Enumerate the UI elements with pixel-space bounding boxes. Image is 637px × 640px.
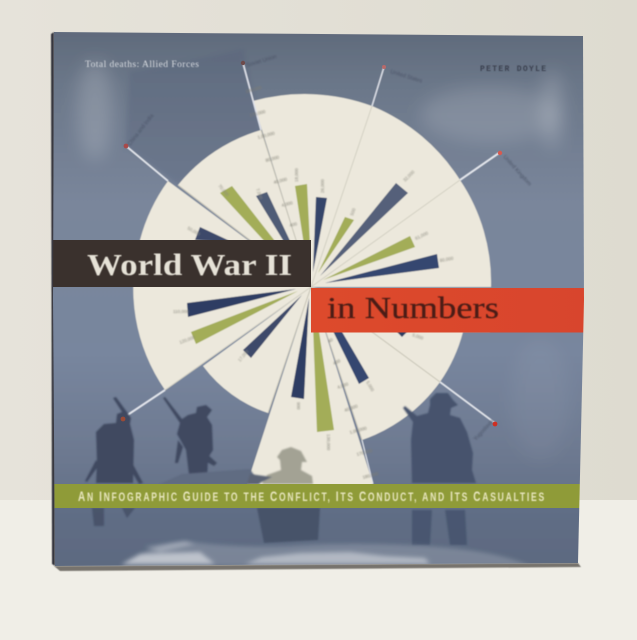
sector: right [311, 180, 491, 287]
axis tick labels [245, 85, 379, 480]
sector: top [253, 94, 372, 287]
value labels on bars: 5,000 [412, 332, 424, 341]
axis tick labels: 400 [289, 221, 298, 228]
axis tick labels: 180,000 [245, 85, 262, 94]
value labels on bars: 80,000 [439, 256, 454, 263]
axis tick labels: 170,000 [249, 109, 266, 118]
axis tick labels: 1,00,000 [257, 130, 276, 140]
background: table top [0, 500, 637, 640]
value labels on bars: 70,000 [217, 183, 230, 198]
book cover [50, 30, 591, 570]
book spine edge [51, 32, 55, 566]
soldier silhouette: left, with rifle [85, 397, 143, 526]
country labels at leader ends: United States [389, 69, 423, 85]
value labels on bars: 32,000 [402, 169, 416, 183]
author name: PETER DOYLE [480, 65, 546, 74]
value labels on bars [173, 168, 454, 451]
title: in Numbers: in Numbers [327, 290, 499, 325]
value labels on bars: 900 [296, 402, 301, 410]
axis tick labels: 4,000 [281, 200, 294, 208]
axis tick labels: 4,000 [337, 381, 349, 390]
value labels on bars: 130,000 [326, 434, 331, 451]
value labels on bars: 17,000 [237, 349, 250, 363]
tagline text: AN INFOGRAPHIC GUIDE TO THE CONFLICT, ITS CONDUCT, AND ITS CASUALTIES [78, 488, 546, 504]
value labels on bars: 500 [349, 207, 357, 216]
soldier silhouette: centre, in disc [247, 447, 313, 484]
subtitle band [311, 288, 591, 332]
value labels on bars: 120,000 [179, 335, 196, 345]
axis tick labels: 80,000 [265, 154, 280, 163]
value labels on bars: 5,000 [365, 380, 375, 393]
chart caption: Total deaths: Allied Forces [85, 60, 199, 70]
sector: left [133, 181, 311, 390]
sector: upper left [178, 130, 296, 240]
value labels on bars: 110,000 [173, 309, 189, 314]
axis tick labels: 40,000 [344, 403, 359, 413]
title: World War II: World War II [87, 247, 292, 282]
cover water reflection at bottom [120, 541, 530, 566]
book shadow [54, 563, 581, 571]
soldier silhouette: middle, with rifle [163, 397, 217, 483]
value labels on bars: 18,000 [294, 168, 299, 182]
soldier legs: centre, below band [257, 508, 320, 543]
white disc of sectors [133, 94, 491, 494]
axis tick labels: 170,000 [356, 448, 373, 457]
value labels on bars: 26,000 [320, 179, 325, 193]
sector: bottom [247, 287, 373, 494]
value labels on bars: 50,000 [186, 226, 201, 237]
ground strip behind soldiers [166, 470, 260, 484]
sector: bottom right [326, 332, 440, 440]
country labels at leader ends: China and India [127, 112, 156, 147]
axis tick labels: 40 [327, 337, 334, 344]
country labels at leader ends: United Kingdom [502, 154, 532, 188]
bar chart: radial bars [187, 183, 439, 432]
country labels at leader ends: Yugoslavia [473, 418, 496, 442]
country labels at leader ends: Soviet Union [246, 54, 277, 69]
background: wall [0, 0, 637, 500]
axis tick labels: 1,00,000 [349, 425, 368, 435]
axis tick labels: 400 [332, 358, 342, 366]
value labels on bars: 61,000 [414, 230, 429, 241]
country labels at leader ends [127, 54, 532, 442]
darker sector: upper left [128, 88, 258, 182]
cover highlights: cloud reflections [73, 60, 568, 158]
leader lines from the centre [123, 63, 499, 484]
axis tick labels: 180,000 [362, 471, 379, 480]
sector: bottom left [203, 287, 311, 413]
sector: lower right [311, 287, 491, 382]
tagline band [50, 484, 590, 508]
axis tick labels: 40,000 [273, 176, 288, 185]
leader end dots [121, 61, 502, 426]
sector: upper right [311, 106, 460, 287]
soldier silhouette: right, with helmet and rifle [403, 393, 476, 545]
value labels on bars: 7,000 [255, 188, 264, 200]
title band [50, 240, 311, 287]
